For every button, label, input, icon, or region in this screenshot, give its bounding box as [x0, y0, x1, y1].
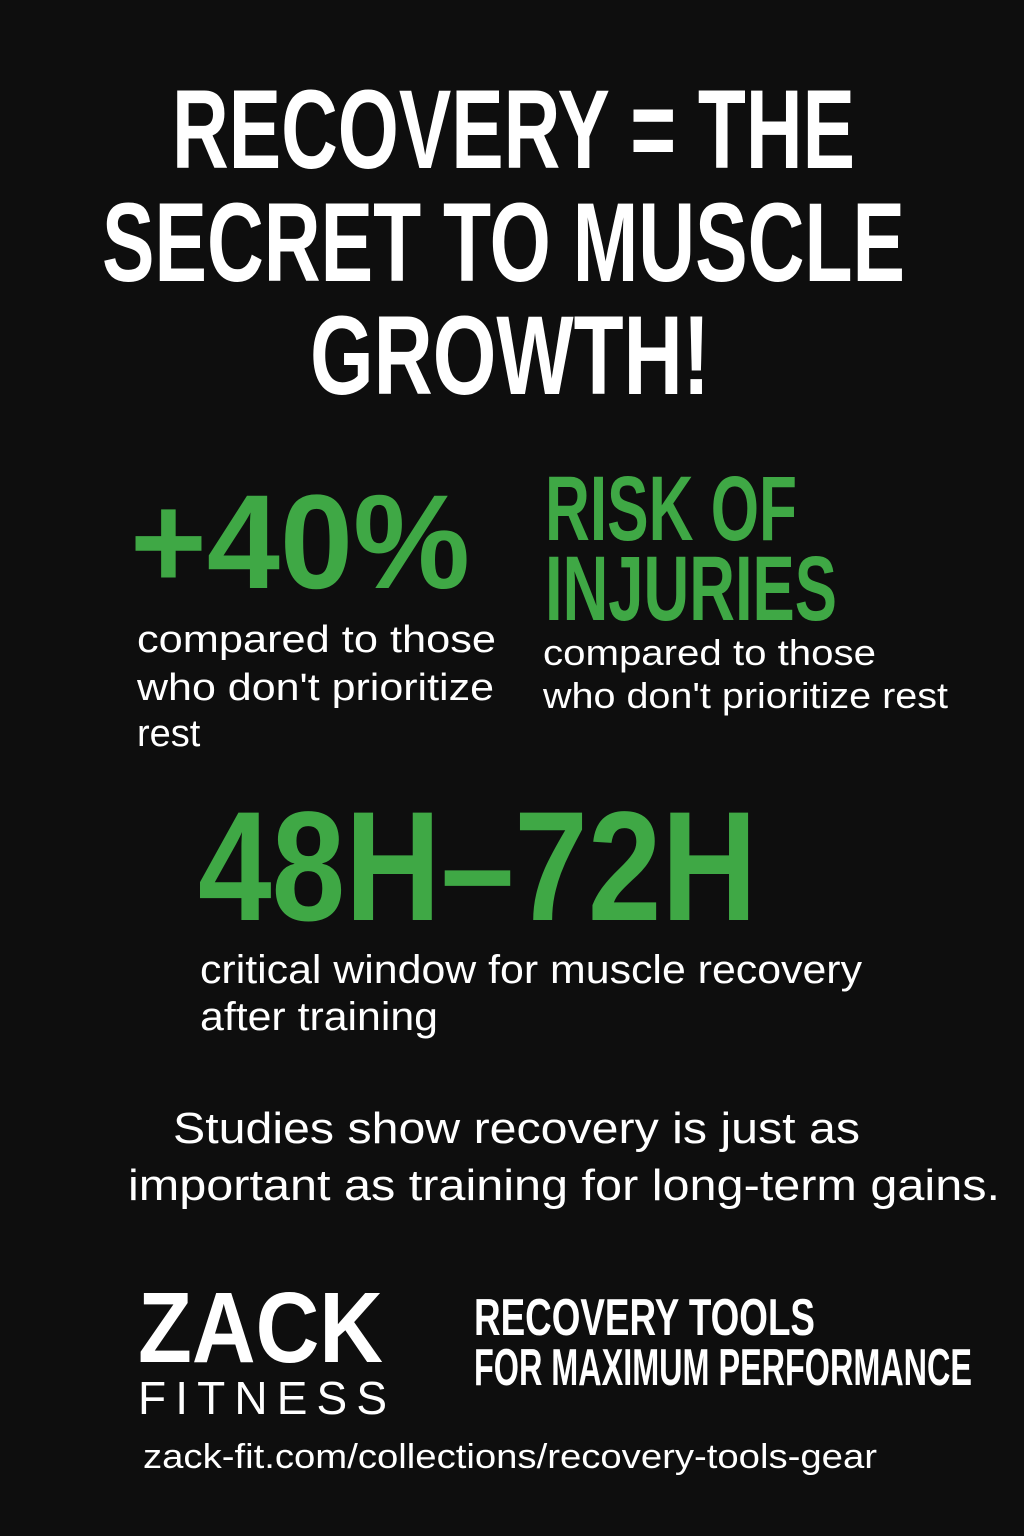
stat: +40%: compared to those — [137, 619, 496, 661]
tagline: RECOVERY TOOLS — [474, 1289, 815, 1347]
stat: 48H-72H: after training — [200, 995, 438, 1039]
stat: risk of injuries — [542, 458, 948, 716]
studies statement: important as training for long-term gains. — [128, 1161, 1000, 1210]
logo: Zack Fitness: ZACK — [138, 1272, 383, 1384]
stat: risk of injuries: compared to those — [543, 632, 876, 673]
stat: +40% — [130, 468, 496, 755]
stat: risk of injuries: who don't prioritize rest — [542, 675, 948, 716]
stat: +40%: +40% — [130, 468, 470, 617]
stat: 48H-72H — [198, 780, 862, 1039]
stat: +40%: who don't prioritize — [136, 667, 494, 709]
logo: Zack Fitness — [138, 1272, 387, 1424]
tagline — [474, 1289, 972, 1397]
stat: risk of injuries: RISK OF — [545, 458, 797, 560]
title — [102, 67, 905, 418]
stat: 48H-72H: critical window for muscle recovery — [200, 948, 862, 992]
stat: risk of injuries: INJURIES — [545, 538, 837, 640]
title: GROWTH! — [310, 293, 710, 418]
stat: +40%: rest — [137, 713, 201, 755]
url: zack-fit.com/collections/recovery-tools-gear — [143, 1438, 877, 1476]
studies statement: Studies show recovery is just as — [173, 1104, 860, 1153]
logo: Zack Fitness: FITNESS — [138, 1372, 387, 1424]
studies statement — [128, 1104, 1000, 1210]
stat: 48H-72H: 48H–72H — [198, 780, 757, 954]
